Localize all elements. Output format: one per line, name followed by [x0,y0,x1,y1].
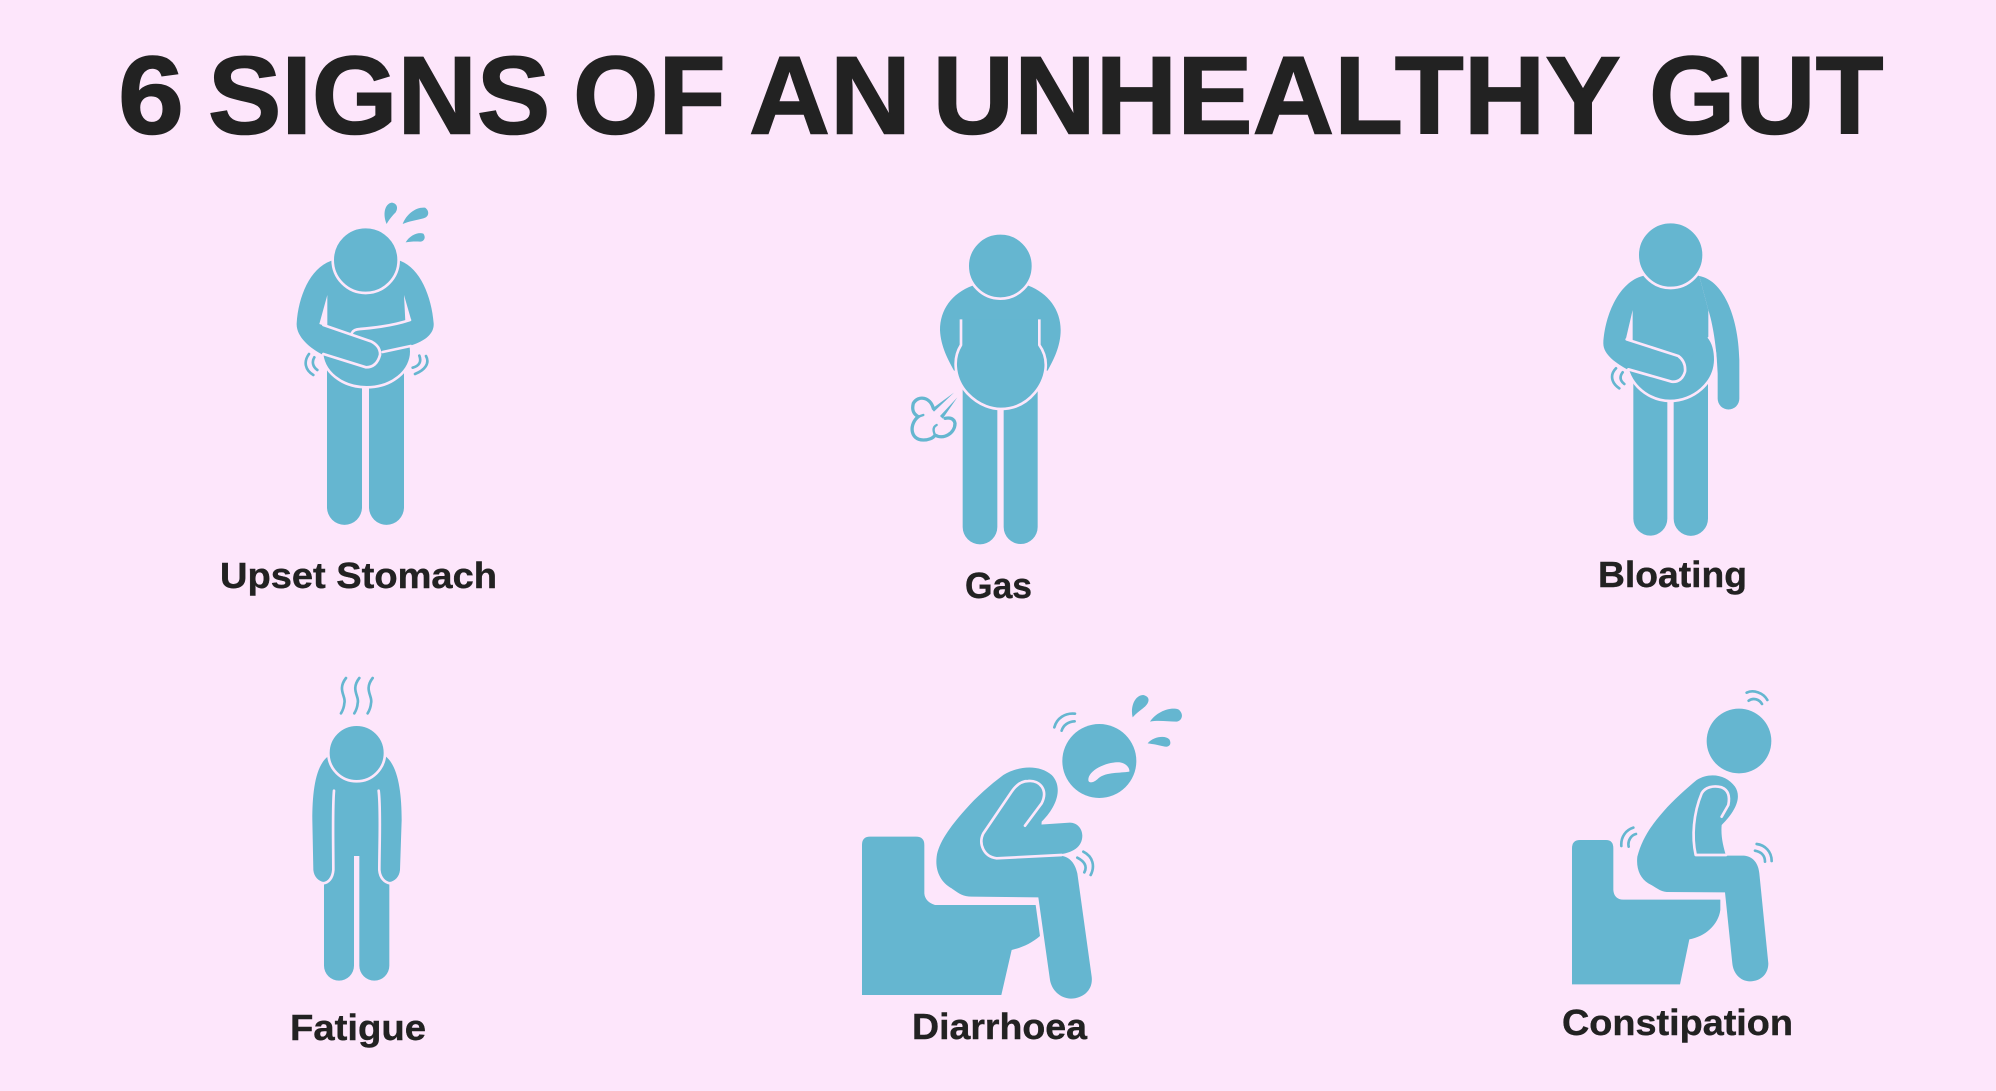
legs [963,387,1038,544]
label: diarrhoea: Diarrhoea [912,1006,1088,1047]
label: bloating: Bloating [1598,554,1747,595]
belly [956,319,1046,409]
head [968,233,1033,299]
legs [1633,377,1708,536]
panel: constipation figure [1572,691,1772,984]
toilet [862,837,1040,995]
torso and forearm [1603,267,1708,382]
head [1707,709,1771,773]
sweat drops [1132,695,1182,747]
label: fatigue: Fatigue [290,1007,426,1048]
head [328,725,385,781]
title: AN [749,34,911,157]
arm outlines [323,320,411,367]
body and leg [1637,775,1768,981]
toilet [1572,840,1720,984]
vibration arcs [306,354,427,375]
arm gaps [319,295,411,325]
hanging arm [1699,276,1739,409]
arm outline [1694,786,1729,855]
panel: bloating figure [1603,222,1739,536]
label: gas: Gas [965,565,1032,606]
title: OF [573,34,726,158]
label: constipation: Constipation [1562,1002,1793,1043]
belly [1627,337,1715,401]
torso and arms [940,286,1061,371]
body and legs [312,743,402,981]
head [333,227,399,293]
head [1638,222,1704,288]
body and leg [936,767,1092,999]
title: 6 [118,34,184,158]
panel: upset stomach figure [297,203,434,525]
vibration arcs [1621,691,1772,862]
label: upset stomach: Upset Stomach [220,555,497,596]
steam lines [341,678,373,713]
legs [327,367,404,525]
torso and arms [297,247,434,367]
arm gap [1626,310,1633,341]
belly [322,316,411,387]
title [118,34,1884,158]
arm [981,781,1082,858]
arm outline [981,781,1062,858]
title: UNHEALTHY [932,34,1621,157]
title: GUT [1649,35,1884,157]
sweat drops [385,203,428,242]
panel: gas figure [912,233,1061,544]
panel: diarrhoea figure [862,695,1182,999]
forearm outline [1627,339,1685,382]
title: SIGNS [208,34,550,158]
head with mouth [1062,724,1136,798]
arm outlines [323,791,390,883]
vibration arcs [1054,714,1093,875]
panel: fatigue figure [312,678,402,981]
vibration arcs [1612,368,1624,388]
icon: gas cloud [912,393,957,440]
